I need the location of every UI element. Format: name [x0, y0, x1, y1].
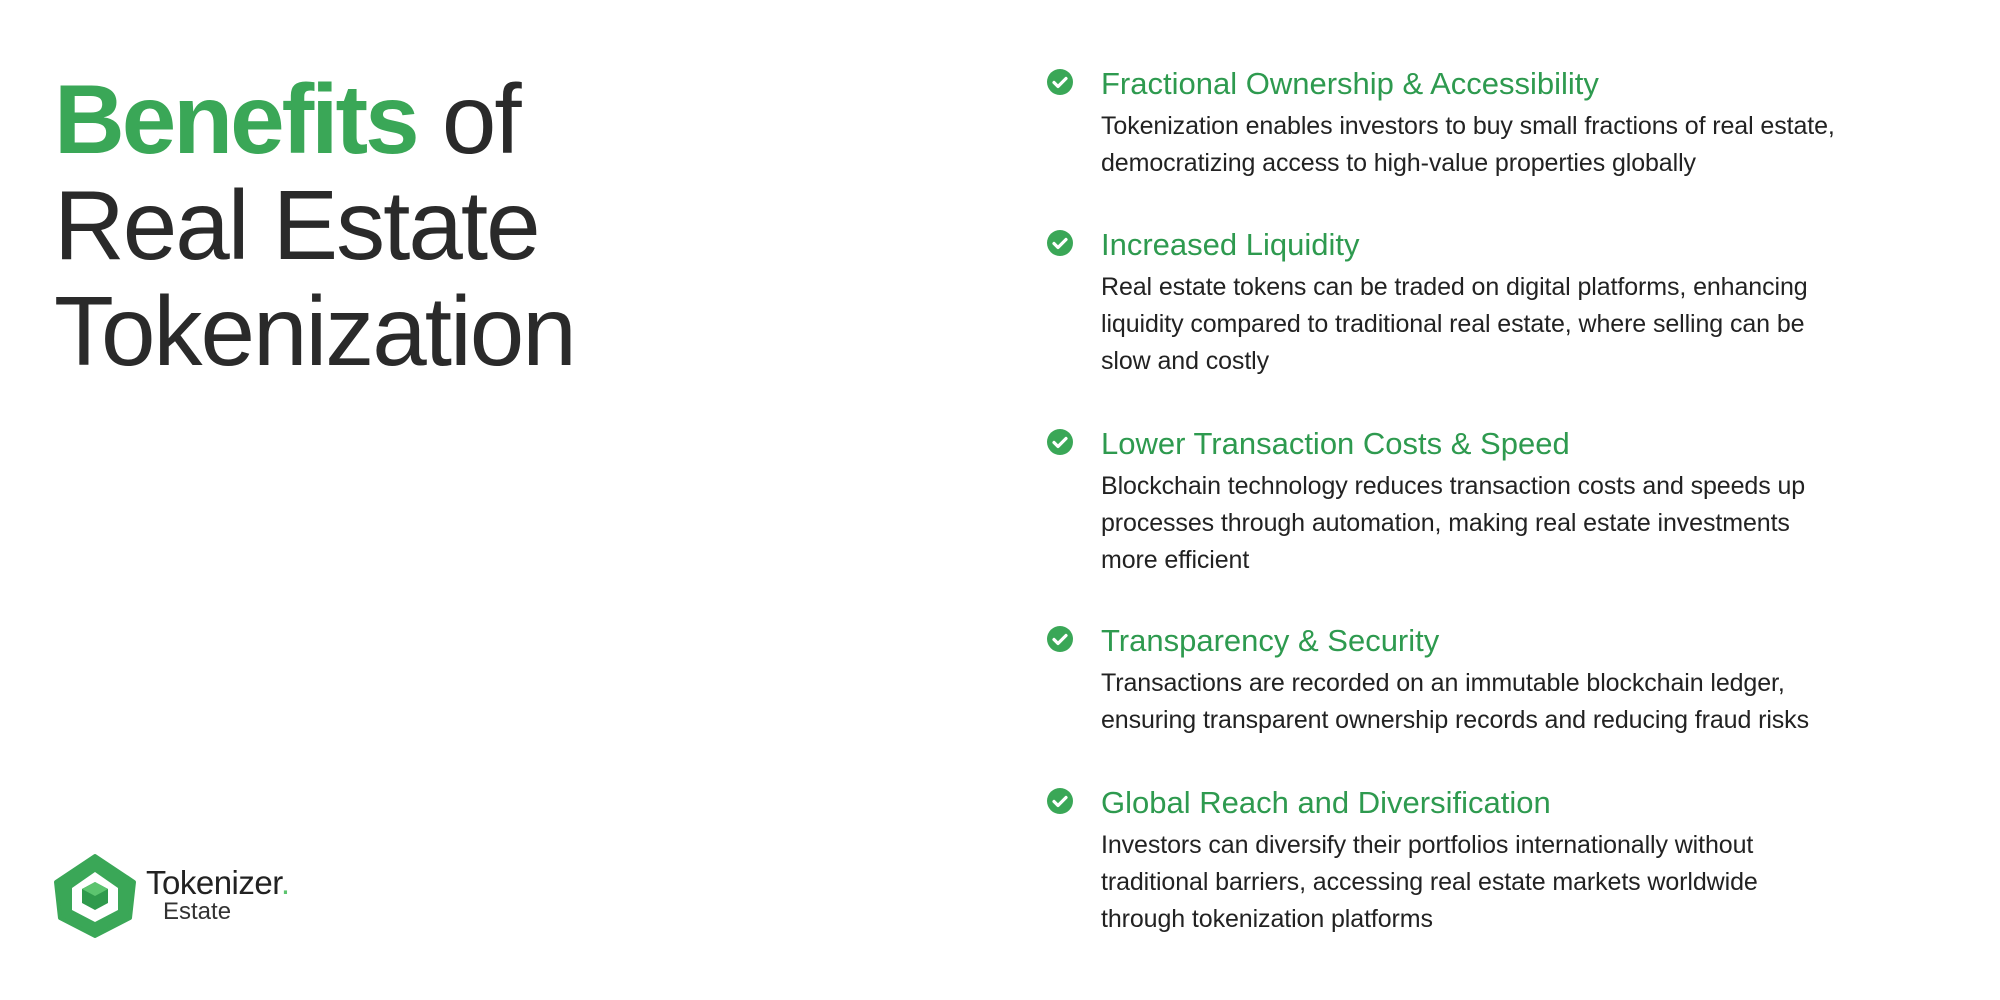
item: transparency	[1047, 623, 1809, 734]
item: global reach	[1047, 785, 1758, 933]
item: transparency: ensuring transparent ownership records and reducing fraud risks	[1101, 706, 1809, 734]
item: transaction costs: Lower Transaction Costs & Speed	[1101, 426, 1570, 461]
item: liquidity: Real estate tokens can be traded on digital platforms, enhancing	[1101, 273, 1808, 301]
item: liquidity: liquidity compared to traditional real estate, where selling can be	[1101, 310, 1804, 338]
title: Benefits of	[54, 64, 520, 174]
logo: Estate	[163, 898, 231, 925]
item: transaction costs: processes through automation, making real estate investments	[1101, 509, 1790, 537]
item: global reach: Investors can diversify their portfolios internationally without	[1101, 831, 1753, 859]
item: transaction costs	[1047, 426, 1805, 574]
item: fractional ownership: Tokenization enables investors to buy small fractions of real estate,	[1101, 112, 1835, 140]
item: liquidity: Increased Liquidity	[1101, 227, 1360, 262]
item: transaction costs: more efficient	[1101, 546, 1249, 574]
item: fractional ownership	[1047, 66, 1835, 177]
title: Tokenization	[54, 276, 575, 386]
item: liquidity: slow and costly	[1101, 347, 1269, 375]
item: fractional ownership: Fractional Ownership & Accessibility	[1101, 66, 1599, 101]
title: Real Estate	[54, 170, 539, 280]
item: liquidity	[1047, 227, 1808, 375]
logo	[54, 854, 290, 938]
item: global reach: through tokenization platforms	[1101, 905, 1433, 933]
icon: house cube	[54, 854, 136, 938]
item: transparency: Transactions are recorded on an immutable blockchain ledger,	[1101, 669, 1785, 697]
item: fractional ownership: democratizing access to high-value properties globally	[1101, 149, 1696, 177]
item: global reach: Global Reach and Diversification	[1101, 785, 1551, 820]
logo text: Tokenizer.	[146, 864, 290, 901]
item: global reach: traditional barriers, accessing real estate markets worldwide	[1101, 868, 1758, 896]
title	[54, 64, 575, 386]
item: transaction costs: Blockchain technology reduces transaction costs and speeds up	[1101, 472, 1805, 500]
item: transparency: Transparency & Security	[1101, 623, 1439, 658]
